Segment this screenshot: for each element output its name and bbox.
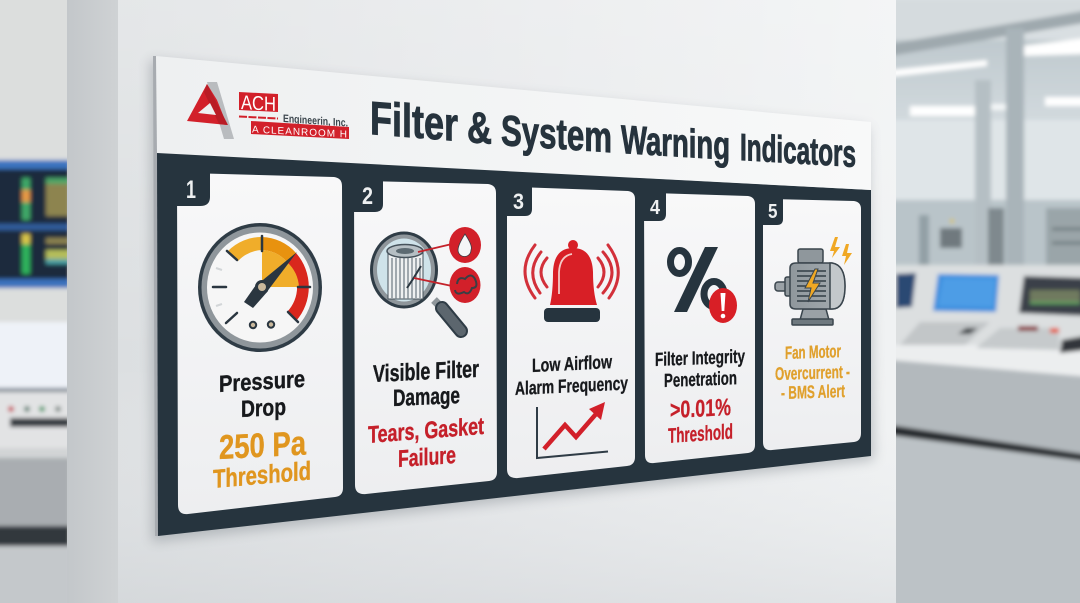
panel 4: filter integrity penetration [644,192,755,463]
heading: filter integrity penetration: Filter Integrity [655,347,745,371]
icon: alarm bell [525,240,618,322]
icon: percent with alert [670,247,737,323]
wall: pillar side face [67,0,118,603]
value: fan motor overcurrent bms alert: - BMS Alert [781,381,845,403]
heading: visible filter damage [373,356,479,411]
panel 5: fan motor overcurrent [763,198,861,450]
card 5 [763,199,861,450]
heading: low airflow alarm frequency: Low Airflow [532,352,612,377]
card 1 [177,173,343,514]
logo tagline box: A CLEANROOM H [252,125,347,140]
icon: electric motor [775,249,845,325]
value: fan motor overcurrent bms alert: Fan Motor [785,341,841,363]
sign edge [153,56,159,536]
number tab 1: 1 [186,176,196,204]
heading: filter integrity penetration: Penetration [664,368,737,392]
heading: filter integrity penetration [655,347,745,392]
number tab 3 [507,186,532,216]
number tab 2 [354,180,383,212]
card 2 [354,181,497,494]
heading: visible filter damage: Visible Filter [373,356,479,388]
value: tears, gasket failure: Tears, Gasket [368,413,484,449]
number tab 5: 5 [768,201,778,223]
logo ACH box: ACH [241,92,276,116]
card 3 [507,187,635,478]
number tab 5 [763,198,783,225]
heading: low airflow alarm frequency: Alarm Frequency [515,373,628,400]
value: 250 Pa threshold: 250 Pa [219,424,307,467]
title: Indicators [740,127,856,176]
logo [187,82,349,140]
panel 1: pressure drop [177,172,343,514]
number tab 2: 2 [362,183,373,210]
value: over 0.01% threshold [668,394,733,448]
value: over 0.01% threshold: Threshold [668,420,733,448]
title: & [467,103,492,154]
number tab 1 [177,172,210,206]
value: over 0.01% threshold: >0.01% [670,394,731,424]
number tab 4: 4 [650,197,661,219]
card 4 [644,193,755,463]
sign header strip [156,56,871,190]
value: tears, gasket failure [368,413,484,473]
title: System [501,107,612,162]
value: tears, gasket failure: Failure [398,442,456,473]
title: Warning [621,118,730,169]
value: 250 Pa threshold [213,424,311,494]
panel 3: low airflow alarm frequency [507,186,635,478]
title [370,91,856,176]
logo company text: Engineerin, Inc. [283,113,348,130]
heading: pressure drop [219,366,305,422]
value: 250 Pa threshold: Threshold [213,455,311,494]
heading: pressure drop: Drop [241,394,286,422]
logo dashed rule [239,116,278,118]
wall sign [153,56,871,536]
number tab 4 [644,192,666,221]
number tab 3: 3 [513,189,524,214]
title: Filter [370,91,458,151]
heading: low airflow alarm frequency [515,352,628,400]
sign dark panel [157,152,871,536]
background: left blurred control room [0,0,80,603]
chart: rising trend line [537,402,608,458]
sign shadow [150,60,874,542]
panel 2: visible filter damage [354,180,497,494]
background: right blurred cleanroom [890,0,1080,603]
icon: pressure gauge [198,223,322,352]
wall: front face [118,0,896,603]
icon: magnifier over filter [370,227,481,331]
value: fan motor overcurrent bms alert: Overcurrent - [775,362,850,384]
heading: pressure drop: Pressure [219,366,305,397]
icon: sparks [830,237,852,265]
heading: visible filter damage: Damage [393,382,460,411]
value: fan motor overcurrent bms alert [775,341,850,403]
logo mark [187,82,234,139]
